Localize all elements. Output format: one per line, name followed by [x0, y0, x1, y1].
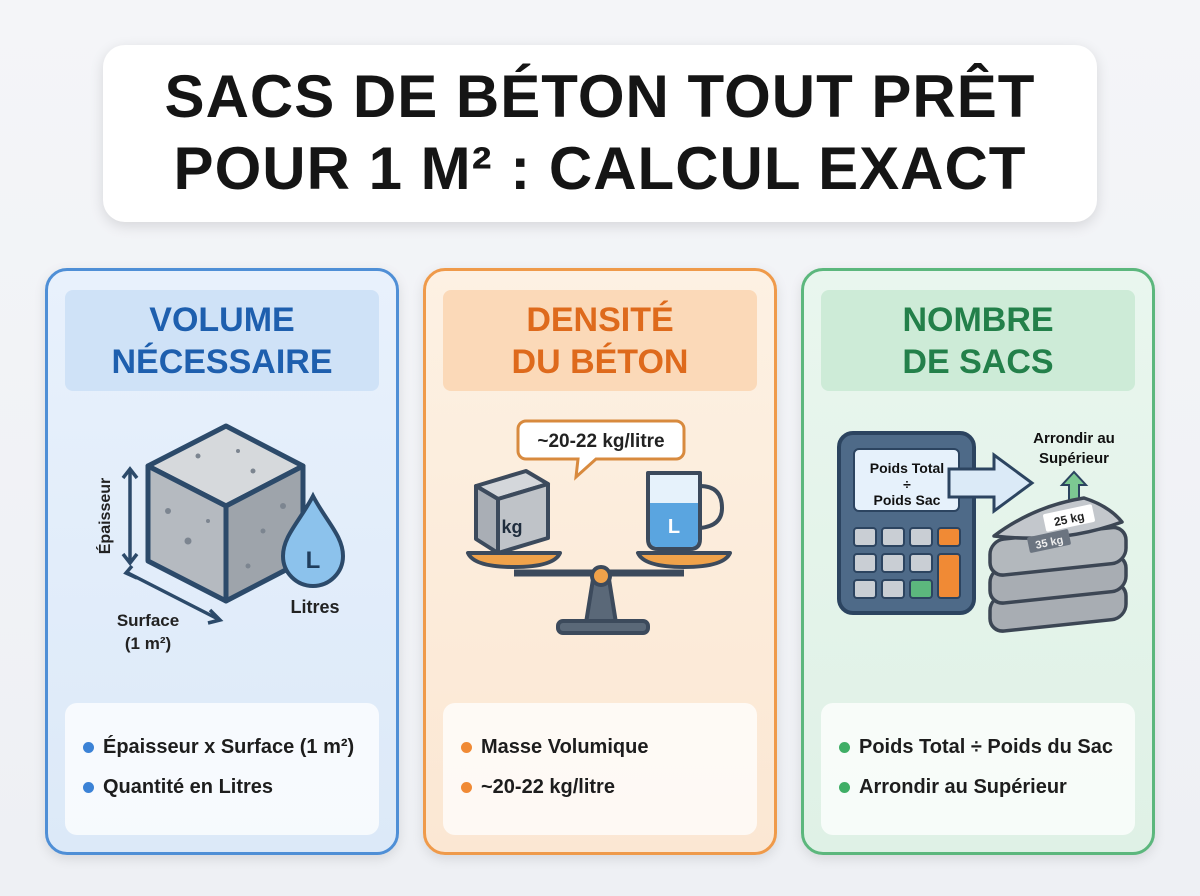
- heading: densite: DU BÉTON: [512, 343, 688, 381]
- heading: densite: [443, 290, 757, 391]
- heading: volume: NÉCESSAIRE: [111, 343, 333, 381]
- list: nombre: [821, 703, 1135, 835]
- list: densite: Masse Volumique: [481, 736, 648, 758]
- heading: volume: [65, 290, 379, 391]
- icon: balance scale: L: [668, 516, 680, 538]
- icon: cube with litre drop: Surface: [117, 611, 179, 630]
- icon: calculator and bags: ÷: [903, 476, 911, 492]
- list: densite: [443, 703, 757, 835]
- heading: nombre: DE SACS: [902, 343, 1054, 381]
- icon: cube with litre drop: L: [306, 547, 320, 574]
- icon: calculator and bags: Poids Sac: [874, 492, 941, 508]
- title: POUR 1 M² : CALCUL EXACT: [174, 135, 1026, 202]
- title: [103, 45, 1097, 222]
- icon: calculator and bags: 35 kg: [1034, 534, 1064, 552]
- list: volume: Épaisseur x Surface (1 m²): [103, 736, 354, 758]
- panel: nombre de sacs: [801, 268, 1155, 855]
- list: densite: ~20-22 kg/litre: [481, 776, 615, 798]
- list: nombre: Arrondir au Supérieur: [859, 776, 1067, 798]
- heading: volume: VOLUME: [149, 301, 295, 339]
- list: nombre: Poids Total ÷ Poids du Sac: [859, 736, 1113, 758]
- icon: calculator and bags: Supérieur: [1039, 450, 1109, 467]
- heading: densite: DENSITÉ: [526, 301, 674, 339]
- icon: cube with litre drop: Litres: [290, 597, 340, 617]
- icon: balance scale: kg: [501, 517, 523, 537]
- list: volume: [65, 703, 379, 835]
- icon: calculator and bags: [837, 430, 1128, 633]
- icon: calculator and bags: 25 kg: [1053, 509, 1086, 529]
- heading: nombre: NOMBRE: [902, 301, 1054, 339]
- icon: cube with litre drop: (1 m²): [125, 634, 171, 653]
- icon: cube with litre drop: Épaisseur: [95, 478, 114, 554]
- icon: balance scale: [466, 420, 732, 635]
- panel: densite: [423, 268, 777, 855]
- icon: calculator and bags: Arrondir au: [1033, 430, 1115, 447]
- title: SACS DE BÉTON TOUT PRÊT: [165, 63, 1035, 130]
- heading: nombre: [821, 290, 1135, 391]
- list: volume: Quantité en Litres: [103, 776, 273, 798]
- icon: calculator and bags: Poids Total: [870, 460, 944, 476]
- icon: cube with litre drop: [95, 424, 345, 653]
- icon: balance scale: ~20-22 kg/litre: [537, 431, 665, 452]
- panel: volume: [45, 268, 399, 855]
